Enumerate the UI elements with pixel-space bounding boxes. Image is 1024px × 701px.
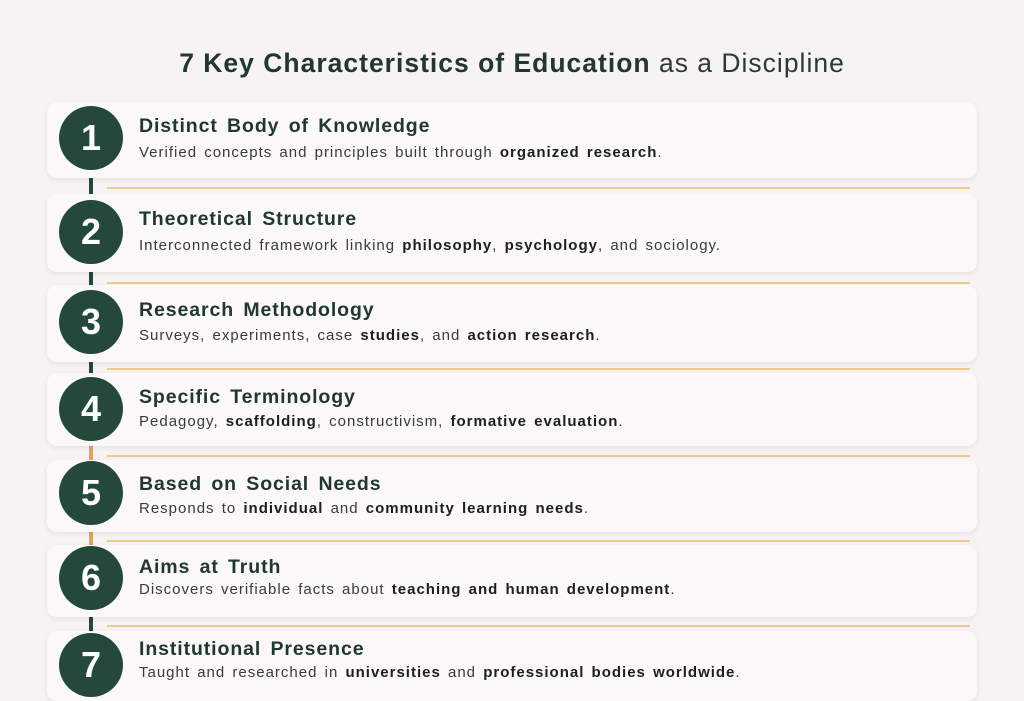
number circles: 1 <box>81 117 101 158</box>
card 1: Distinct Body of Knowledge <box>139 115 430 137</box>
card 4: Pedagogy, scaffolding, constructivism, formative evaluation. <box>139 413 624 430</box>
number circles: 3 <box>81 301 101 342</box>
number circles: 5 <box>81 472 101 513</box>
title: 7 Key Characteristics of Education as a Discipline <box>179 48 845 78</box>
card 2: Interconnected framework linking philosophy, psychology, and sociology. <box>139 237 721 254</box>
card 4: Specific Terminology <box>139 386 356 408</box>
card 3: Research Methodology <box>139 299 375 321</box>
card 5 <box>47 460 977 532</box>
card 6 <box>47 545 977 617</box>
card 1: Verified concepts and principles built through organized research. <box>139 144 663 161</box>
card 6: Aims at Truth <box>139 556 281 578</box>
number circles: 4 <box>81 388 101 429</box>
card 4 <box>47 373 977 446</box>
number circles: 7 <box>81 644 101 685</box>
connector line <box>89 140 93 440</box>
card 7: Taught and researched in universities and professional bodies worldwide. <box>139 664 741 681</box>
number circles <box>59 106 123 697</box>
card 6: Discovers verifiable facts about teaching and human development. <box>139 581 675 598</box>
card 5: Responds to individual and community learning needs. <box>139 500 589 517</box>
card 2 <box>47 194 977 272</box>
card 3: Surveys, experiments, case studies, and action research. <box>139 327 601 344</box>
card 3 <box>47 285 977 362</box>
card 2: Theoretical Structure <box>139 208 357 230</box>
card 1 <box>47 102 977 178</box>
number circles: 6 <box>81 557 101 598</box>
number circles: 2 <box>81 211 101 252</box>
card 7 <box>47 631 977 701</box>
card 7: Institutional Presence <box>139 638 364 660</box>
card 5: Based on Social Needs <box>139 473 381 495</box>
